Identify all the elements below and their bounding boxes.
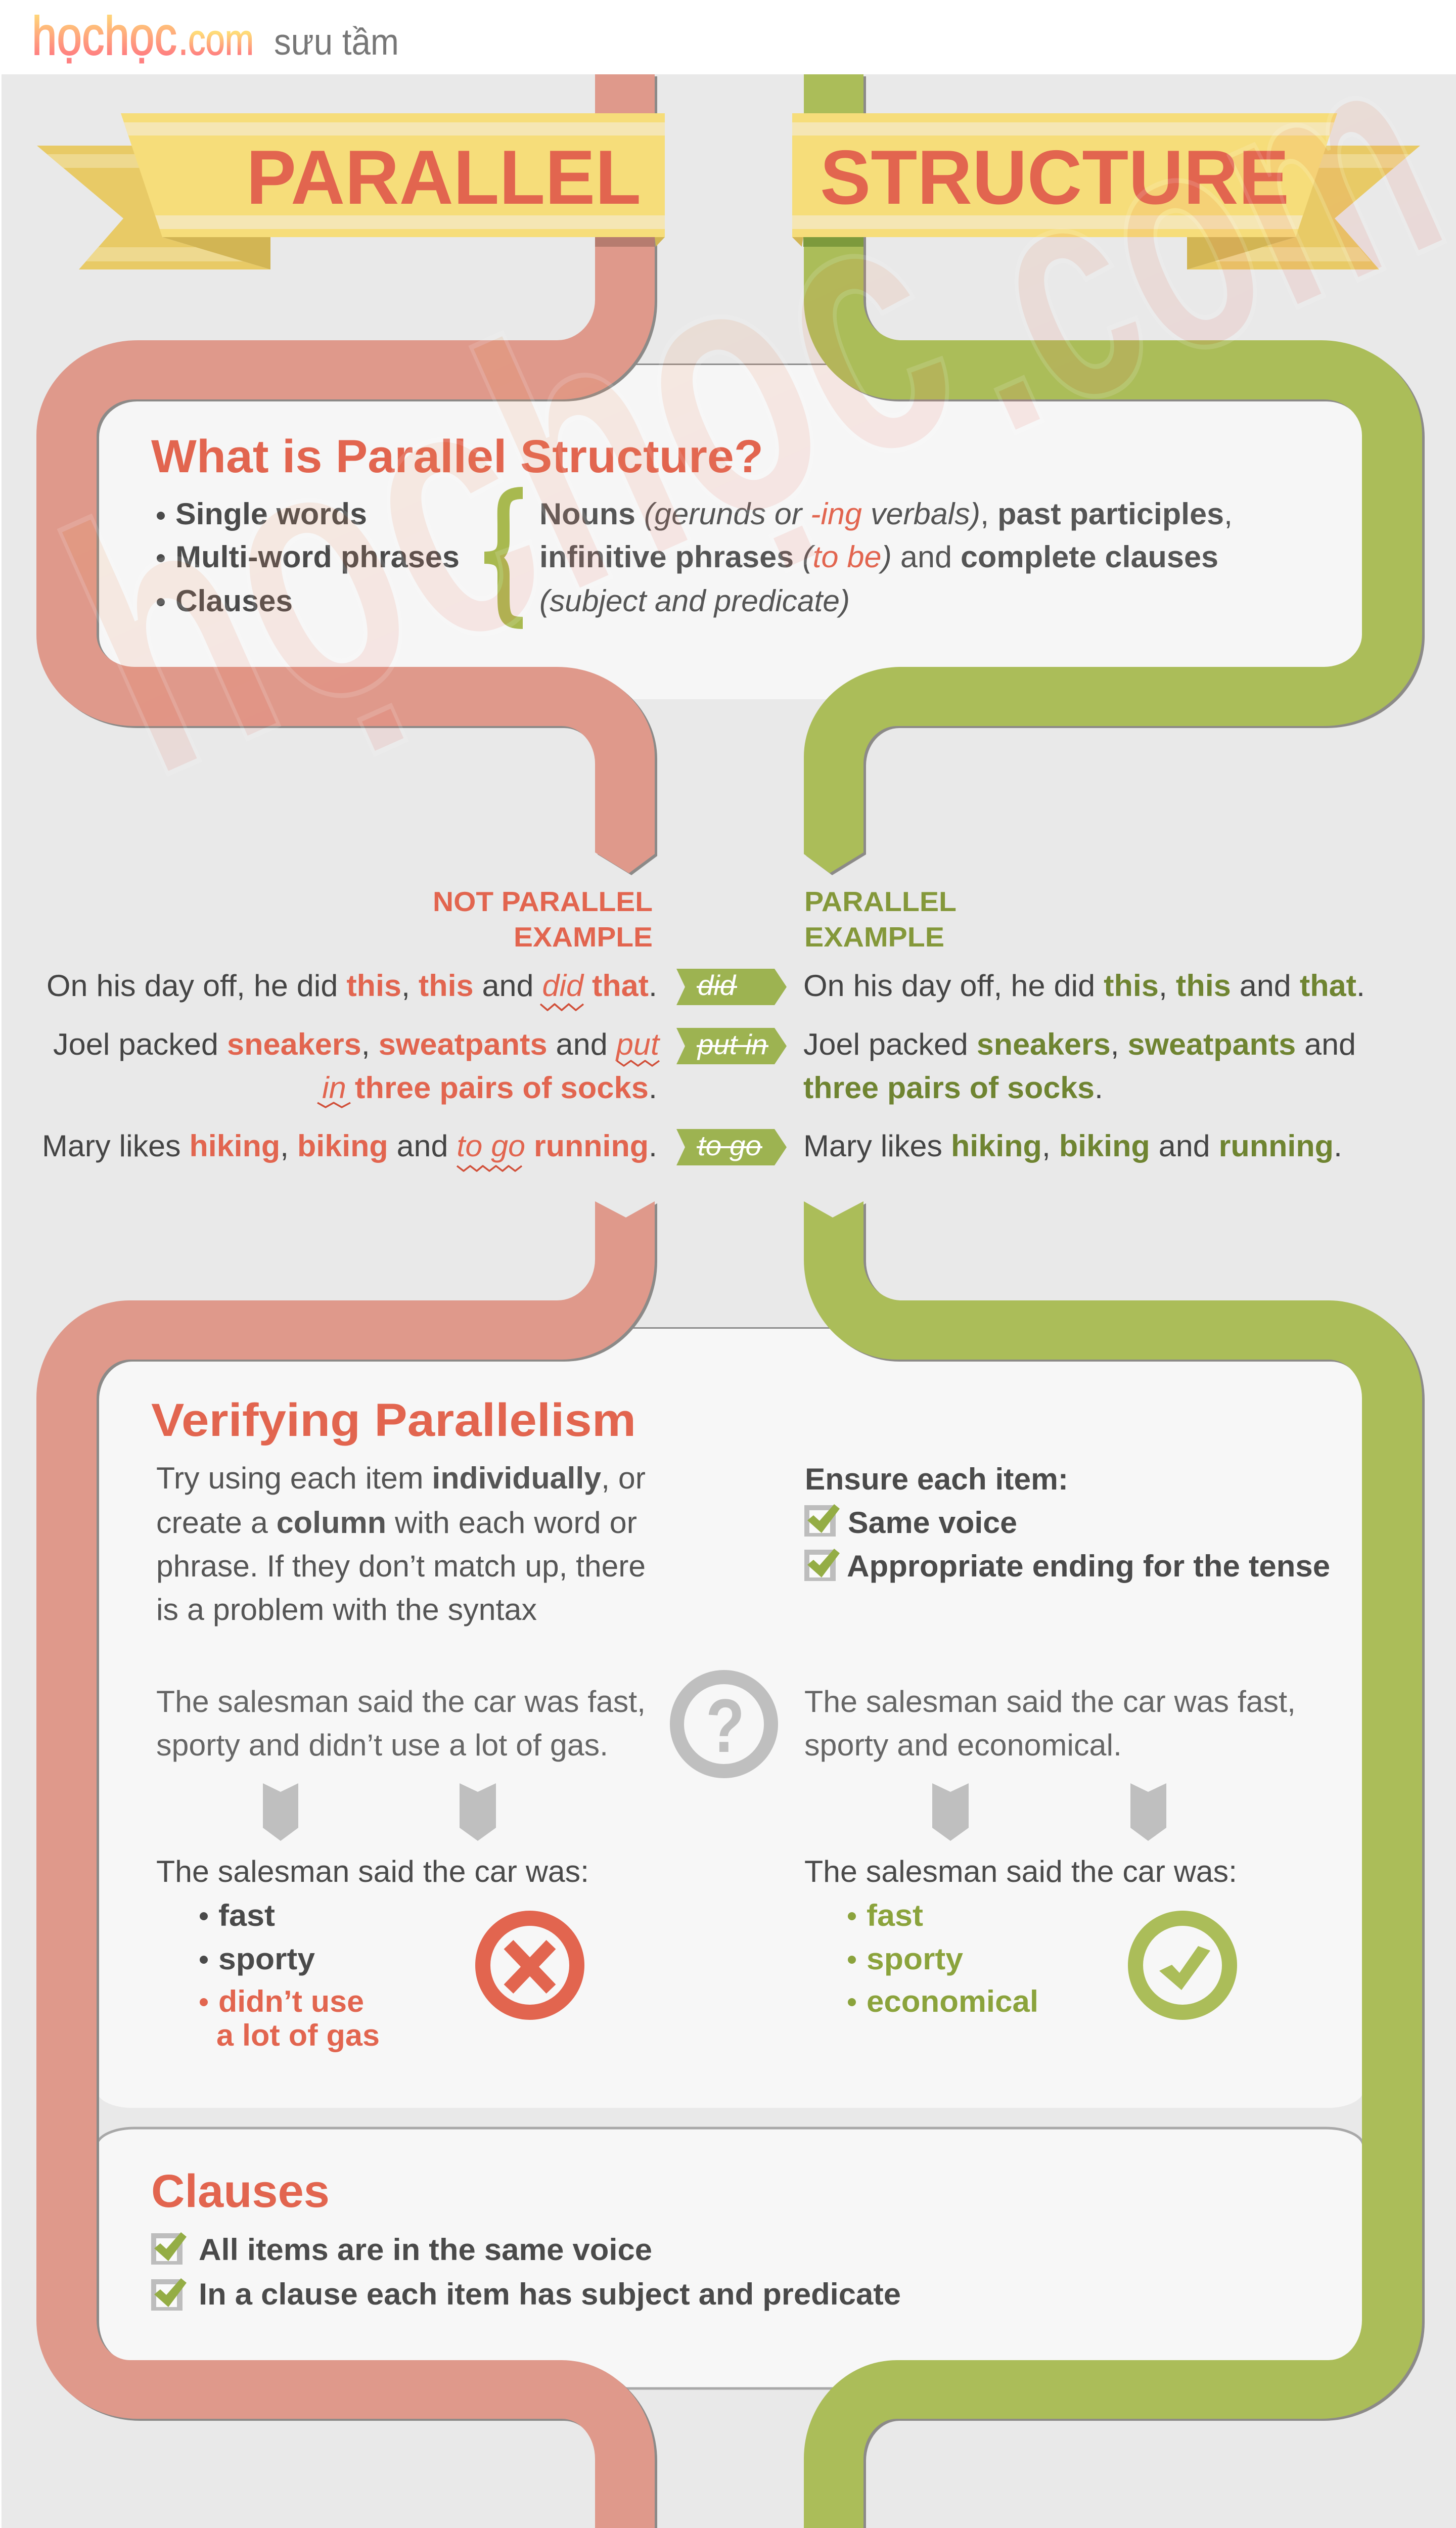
arrow tag: put in: put in bbox=[697, 1028, 767, 1060]
pipe: green top section bbox=[804, 74, 1425, 875]
example row 2: parallel bbox=[803, 1027, 1356, 1105]
text: definition of items bbox=[539, 497, 1233, 618]
header logo: hochoc.com suu tam: sưu tầm bbox=[274, 22, 399, 63]
panel: what is parallel structure background bbox=[97, 364, 1363, 699]
heading: clauses: Clauses bbox=[151, 2165, 330, 2217]
checklist: clauses: All items are in the same voice bbox=[199, 2233, 652, 2267]
label: parallel example: PARALLEL bbox=[804, 886, 957, 917]
banner: STRUCTURE: STRUCTURE bbox=[820, 134, 1289, 220]
checklist: ensure each item: Appropriate ending for the tense bbox=[847, 1549, 1330, 1583]
arrow: gray down 1 bbox=[263, 1783, 298, 1841]
text: salesman example parallel: The salesman said the car was fast, bbox=[804, 1685, 1296, 1719]
heading: what is parallel structure: What is Parallel Structure? bbox=[151, 431, 763, 482]
text: definition of items: Nouns (gerunds or -ing verbals), past participles, bbox=[539, 497, 1233, 531]
list: item types: Clauses bbox=[175, 584, 293, 618]
checklist: clauses bbox=[151, 2232, 901, 2311]
text: column test not parallel: a lot of gas bbox=[216, 2018, 380, 2052]
banner: PARALLEL: PARALLEL bbox=[246, 134, 641, 220]
text: column test not parallel: didn’t use bbox=[218, 1984, 364, 2018]
header logo: hochoc.com suu tam: họchọc bbox=[32, 5, 177, 66]
heading: verifying parallelism: Verifying Parallelism bbox=[151, 1394, 636, 1446]
header logo: hochoc.com suu tam: .com bbox=[178, 16, 254, 64]
pipe: green middle section bbox=[804, 1201, 1425, 2528]
icon: question mark circle bbox=[677, 1677, 771, 1771]
example row 3: not parallel: Mary likes hiking, biking and to go running. bbox=[42, 1129, 657, 1163]
label: not parallel example: EXAMPLE bbox=[514, 921, 653, 953]
text: column test parallel: economical bbox=[867, 1984, 1038, 2018]
banner: STRUCTURE bbox=[792, 113, 1337, 247]
text: try using each item: phrase. If they don’t match up, there bbox=[156, 1549, 646, 1583]
label: parallel example: EXAMPLE bbox=[804, 921, 944, 953]
checkbox 2 bbox=[804, 1549, 840, 1581]
label: not parallel example bbox=[433, 886, 653, 953]
text: definition of items: (subject and predicate) bbox=[539, 584, 850, 618]
checklist: ensure each item bbox=[804, 1462, 1330, 1583]
text: column test parallel: sporty bbox=[867, 1942, 964, 1976]
icon: question mark circle: ? bbox=[706, 1683, 745, 1768]
text: column test not parallel: The salesman said the car was: bbox=[156, 1855, 589, 1888]
arrow tag: to go bbox=[676, 1129, 787, 1165]
checkbox 3 bbox=[151, 2232, 187, 2265]
example row 2: not parallel bbox=[53, 1027, 660, 1107]
icon: red x circle bbox=[483, 1918, 577, 2012]
ribbon tail: left bbox=[37, 146, 270, 269]
arrow tag: to go: to go bbox=[698, 1130, 761, 1161]
checkbox 1 bbox=[804, 1504, 840, 1537]
list: item types: Single words bbox=[175, 497, 367, 531]
list: item types bbox=[157, 497, 460, 618]
checklist: ensure each item: Same voice bbox=[848, 1506, 1017, 1540]
example row 2: parallel: three pairs of socks. bbox=[803, 1071, 1103, 1105]
example row 2: not parallel: Joel packed sneakers, sweatpants and put bbox=[53, 1027, 660, 1061]
icon: green check circle bbox=[1135, 1918, 1230, 2012]
text: salesman example parallel bbox=[804, 1685, 1296, 1762]
arrow tag: did: did bbox=[698, 969, 737, 1001]
arrow: gray down 2 bbox=[460, 1783, 496, 1841]
label: not parallel example: NOT PARALLEL bbox=[433, 886, 653, 917]
text: column test parallel: fast bbox=[867, 1899, 923, 1932]
text: try using each item: create a column with each word or bbox=[156, 1506, 637, 1540]
arrow: gray down 4 bbox=[1130, 1783, 1166, 1841]
ribbon tail: right bbox=[1187, 146, 1420, 269]
arrow tag: did bbox=[676, 969, 787, 1005]
text: definition of items: infinitive phrases (to be) and complete clauses bbox=[539, 540, 1218, 574]
label: parallel example bbox=[804, 886, 957, 953]
text: try using each item: is a problem with the syntax bbox=[156, 1593, 537, 1627]
arrow: gray down 3 bbox=[932, 1783, 969, 1841]
example row 2: not parallel: in three pairs of socks. bbox=[322, 1071, 657, 1105]
text: salesman example parallel: sporty and economical. bbox=[804, 1728, 1122, 1762]
text: salesman example not parallel: The salesman said the car was fast, bbox=[156, 1685, 646, 1719]
list: item types: Multi-word phrases bbox=[175, 540, 460, 574]
header logo: hochoc.com suu tam bbox=[32, 5, 399, 66]
text: column test not parallel bbox=[156, 1855, 589, 2052]
text: column test parallel bbox=[804, 1855, 1237, 2018]
example row 1: not parallel: On his day off, he did this, this and did that. bbox=[47, 969, 657, 1003]
text: column test not parallel: fast bbox=[218, 1899, 275, 1932]
checklist: clauses: In a clause each item has subject and predicate bbox=[199, 2277, 901, 2311]
checklist: ensure each item: Ensure each item: bbox=[805, 1462, 1068, 1496]
panel: verifying parallelism background bbox=[97, 1327, 1363, 2108]
example row 3: parallel: Mary likes hiking, biking and running. bbox=[803, 1129, 1342, 1163]
panel: clauses background bbox=[97, 2128, 1363, 2388]
icon: green brace bbox=[484, 493, 523, 623]
example row 1: parallel: On his day off, he did this, this and that. bbox=[803, 969, 1365, 1003]
pipe: red top section bbox=[36, 74, 657, 875]
text: try using each item: Try using each item individually, or bbox=[156, 1461, 646, 1495]
text: salesman example not parallel: sporty and didn’t use a lot of gas. bbox=[156, 1728, 608, 1762]
pipe: red middle section bbox=[36, 1201, 657, 2528]
arrow tag: put in bbox=[676, 1028, 787, 1064]
text: salesman example not parallel bbox=[156, 1685, 646, 1762]
text: try using each item bbox=[156, 1461, 646, 1627]
text: column test parallel: The salesman said the car was: bbox=[804, 1855, 1237, 1888]
checkbox 4 bbox=[151, 2278, 187, 2311]
text: column test not parallel: sporty bbox=[218, 1942, 315, 1976]
example row 2: parallel: Joel packed sneakers, sweatpants and bbox=[803, 1027, 1356, 1061]
banner: PARALLEL bbox=[121, 113, 665, 247]
